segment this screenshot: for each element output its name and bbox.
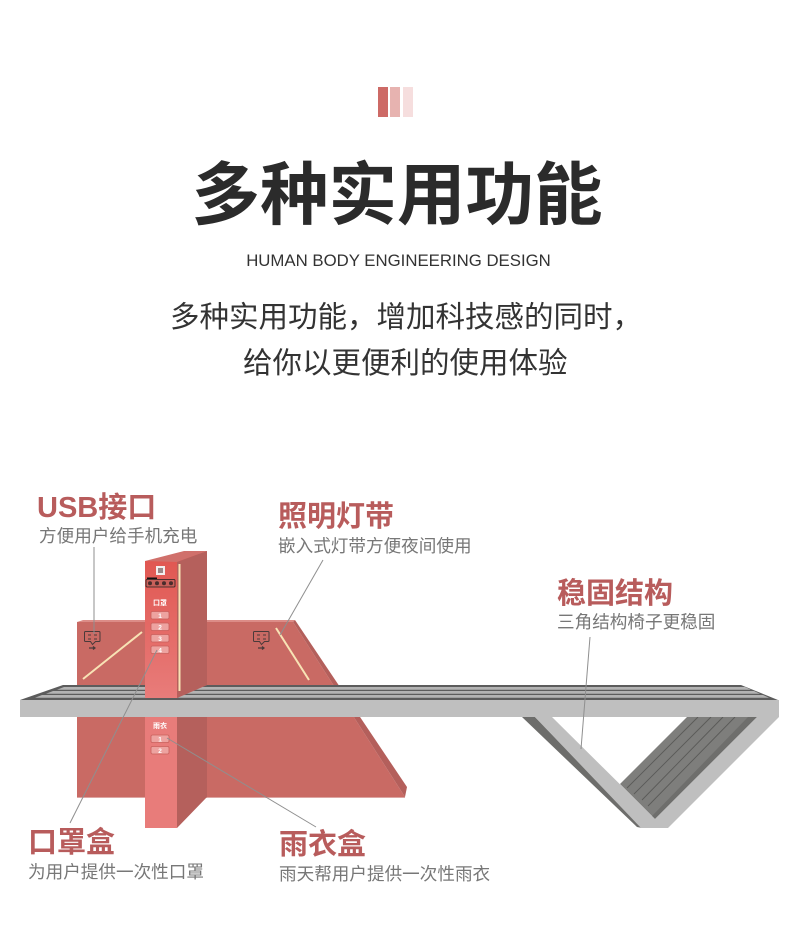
label: mask box: 口罩盒 — [28, 826, 115, 859]
icon: usb port left — [84, 632, 100, 650]
intro text: 给你以更便利的使用体验 — [243, 347, 568, 380]
label: mask box: 为用户提供一次性口罩 — [28, 862, 204, 882]
right leg structure — [522, 717, 779, 828]
back panel — [77, 620, 407, 798]
tower upper section — [145, 551, 207, 698]
mask box buttons — [151, 599, 169, 654]
subtitle: HUMAN BODY ENGINEERING DESIGN — [246, 251, 551, 270]
led strip left — [83, 632, 142, 679]
label: stable structure: 三角结构椅子更稳固 — [557, 612, 715, 632]
bench illustration — [20, 551, 779, 828]
label: light strip — [278, 500, 472, 556]
tower led strip — [178, 564, 180, 691]
intro text: 多种实用功能，增加科技感的同时， — [170, 301, 642, 334]
label: mask box — [28, 826, 204, 882]
label: usb port: USB接口 — [37, 491, 156, 524]
label: raincoat box: 雨衣盒 — [279, 828, 366, 861]
intro text — [170, 301, 642, 380]
raincoat box buttons: 雨衣 — [153, 721, 167, 730]
raincoat box buttons — [151, 721, 169, 755]
callout lines — [70, 547, 590, 827]
label: raincoat box: 雨天帮用户提供一次性雨衣 — [279, 864, 490, 884]
seat top slats — [20, 685, 778, 700]
title: 多种实用功能 — [191, 157, 603, 234]
mask box buttons: 4 — [158, 648, 162, 654]
label: usb port — [37, 491, 197, 546]
raincoat box buttons: 2 — [158, 748, 162, 755]
label: raincoat box — [279, 828, 490, 884]
tower lower section — [145, 717, 207, 828]
label: light strip: 嵌入式灯带方便夜间使用 — [278, 536, 472, 556]
mask box buttons: 口罩 — [153, 599, 167, 607]
led strip right — [276, 628, 309, 680]
mask box buttons: 2 — [158, 624, 162, 632]
header colour bars — [378, 87, 413, 117]
mask box buttons: 3 — [158, 636, 162, 643]
raincoat box buttons: 1 — [158, 736, 162, 744]
mask box buttons: 1 — [158, 613, 162, 620]
label: stable structure — [557, 577, 715, 632]
control strip — [146, 578, 175, 587]
seat front beam — [20, 700, 779, 717]
label: stable structure: 稳固结构 — [557, 577, 673, 610]
icon: usb port right — [254, 632, 269, 650]
label: usb port: 方便用户给手机充电 — [39, 526, 197, 546]
label: light strip: 照明灯带 — [278, 500, 394, 533]
qr code — [156, 566, 165, 575]
